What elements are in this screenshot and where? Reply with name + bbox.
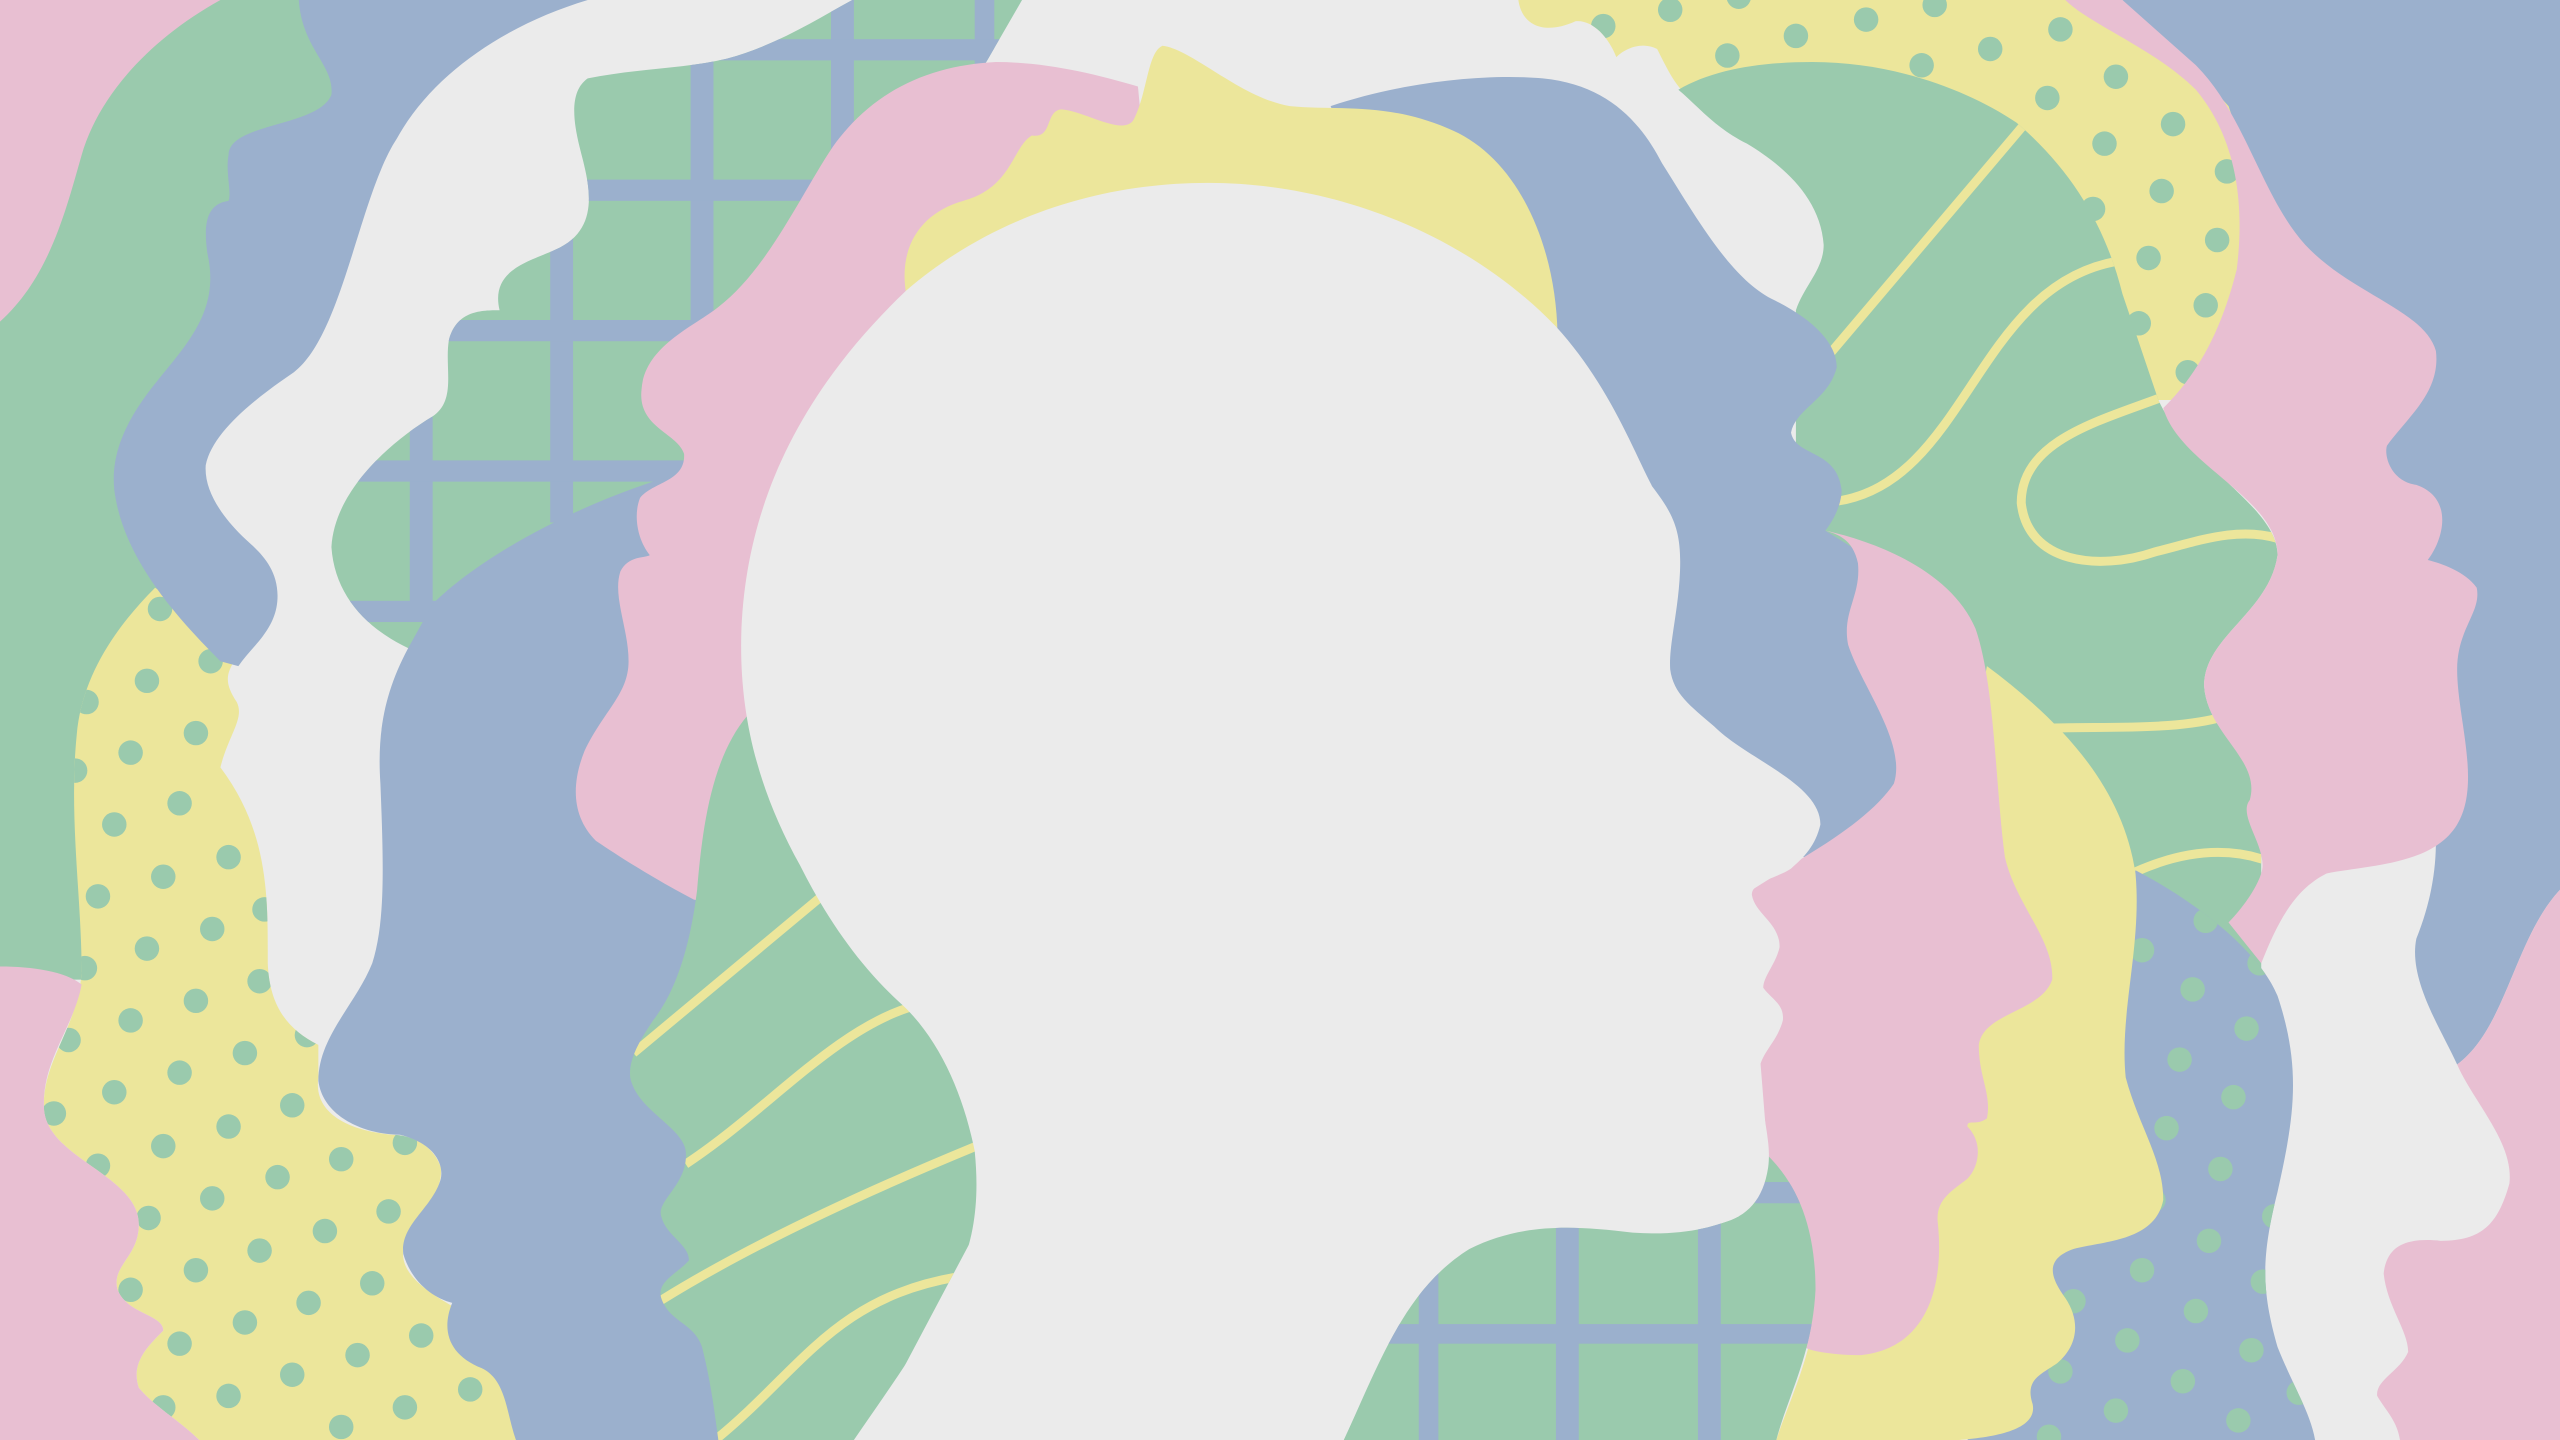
silhouette: green grid top: [331, 0, 1022, 686]
silhouette: pink bottom-right: [2377, 890, 2560, 1440]
silhouette: blue top-left: [114, 0, 588, 666]
silhouette: yellow dotted top-right: [1518, 0, 2261, 400]
silhouette: pink right: [2065, 0, 2477, 963]
silhouette: green grid bottom: [1344, 1156, 1820, 1440]
silhouette: blue behind main head: [1331, 77, 1927, 857]
silhouette: pink top-left corner: [0, 0, 245, 343]
silhouette: pink in front of face: [1747, 531, 2052, 1355]
silhouette: green far left: [0, 0, 351, 980]
silhouette: blue dotted lower-right: [1967, 870, 2315, 1440]
silhouette: green lined lower-left: [630, 715, 980, 1440]
main head silhouette: [741, 183, 1820, 1440]
silhouette: pink centre-left: [576, 62, 1176, 914]
silhouette: yellow lower-right: [1776, 666, 2163, 1440]
silhouette: blue centre-left: [318, 465, 784, 1440]
silhouette: pink lower-left: [0, 967, 199, 1440]
silhouette: yellow dotted left: [42, 588, 516, 1440]
silhouette: yellow behind main head: [905, 46, 1558, 490]
silhouette: blue top-right background: [2122, 0, 2560, 1064]
silhouette: green lined right: [1678, 62, 2279, 980]
